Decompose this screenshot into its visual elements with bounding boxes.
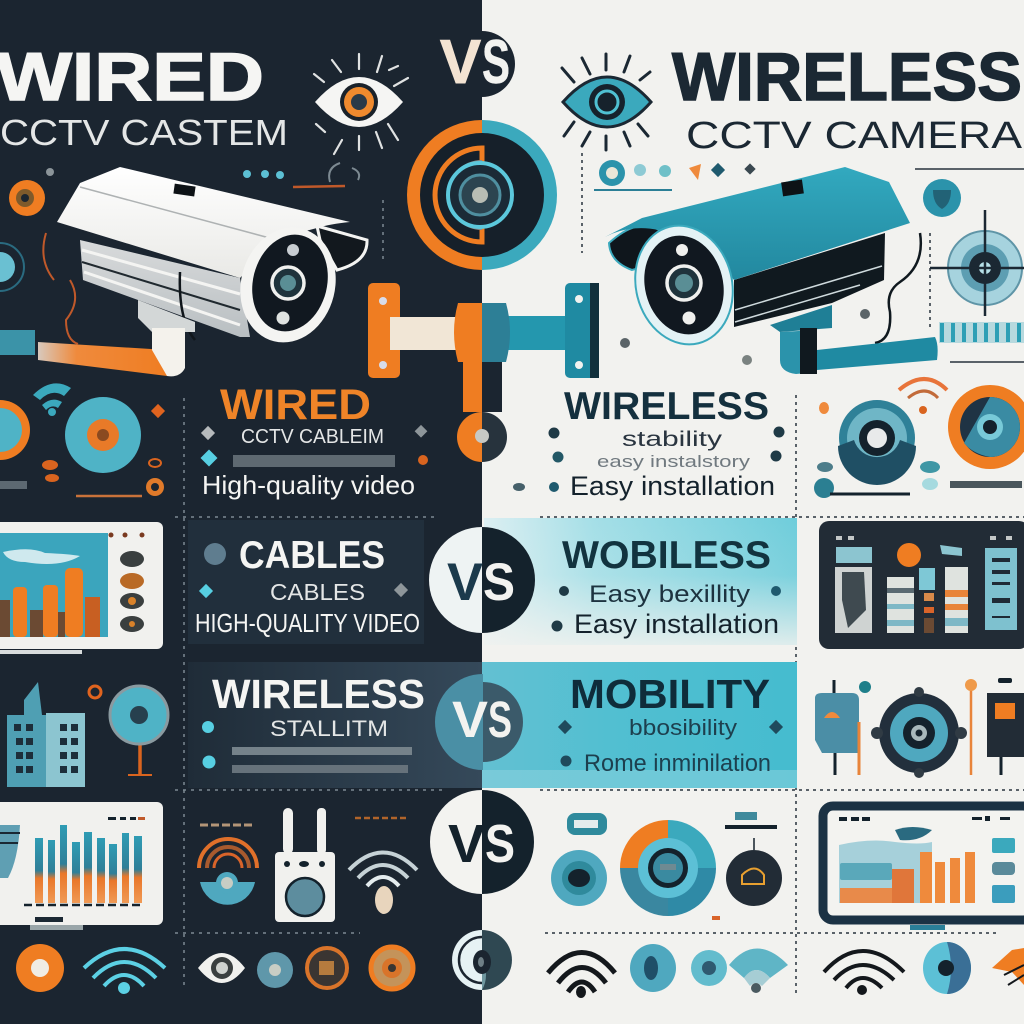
- central mount bracket: [368, 283, 599, 462]
- panel: wobiless: WOBILESS: [562, 534, 771, 577]
- row 4 right monitor chart: [823, 806, 1024, 930]
- heading: wireless: CCTV CAMERA: [686, 115, 1023, 157]
- panel: mobility: bbosibility: [629, 715, 737, 740]
- row 2 right dashboard: [819, 521, 1024, 649]
- row 3 right icons: [815, 678, 1024, 778]
- text block: wired: WIRED: [220, 381, 371, 429]
- panel: cables: HIGH-QUALITY VIDEO: [195, 608, 420, 638]
- heading: wired: WIRED: [0, 39, 264, 115]
- panel: mobility: MOBILITY: [570, 671, 770, 717]
- light right background: [482, 0, 1024, 1024]
- panel: wobiless: Easy installation: [574, 609, 779, 639]
- vs badge row 4: [430, 790, 534, 894]
- text block: wired: High-quality video: [202, 470, 415, 500]
- vs badge top: [440, 28, 515, 97]
- text block: wireless: easy instalstory: [597, 452, 751, 471]
- text block: wireless: stability: [622, 428, 723, 451]
- icon: eye, wired side: [314, 54, 408, 154]
- heading: wireless: WIRELESS: [672, 39, 1022, 115]
- vs badge row 3: V: [452, 691, 488, 748]
- row 4 left monitor chart: [0, 802, 163, 930]
- central lens icon: [407, 120, 557, 270]
- heading: wired: CCTV CASTEM: [0, 112, 288, 153]
- row 2 left panel: monitor: [0, 522, 163, 654]
- text block: wireless: Easy installation: [570, 471, 775, 501]
- text block: wireless: WIRELESS: [564, 385, 769, 428]
- text block: wired: [201, 381, 428, 500]
- bottom center split lens: [452, 930, 512, 990]
- vs badge row 2: V: [447, 553, 483, 612]
- panel: wobiless: [484, 518, 797, 645]
- vs badge row 3: S: [488, 691, 512, 748]
- orange arm of wired mount: [38, 342, 167, 376]
- bottom icons: wireless: [548, 942, 1024, 998]
- vs badge row 2: S: [483, 553, 515, 612]
- panel: wireless left: WIRELESS: [212, 671, 425, 717]
- text block: wireless: [513, 385, 784, 501]
- panel: wireless left: [188, 662, 482, 788]
- vs badge top: S: [482, 28, 510, 97]
- row 4 right icons: [551, 812, 782, 920]
- row 3 left icons: buildings: [7, 682, 168, 787]
- panel: wobiless: Easy bexillity: [589, 581, 750, 608]
- panel: cables: CABLES: [270, 579, 365, 605]
- vs badge row 2: [429, 527, 535, 633]
- bottom icons: wired: [16, 944, 413, 994]
- wired camera illustration: [38, 167, 367, 376]
- icon: eye, wireless side: [562, 54, 651, 150]
- wireless camera illustration: [605, 167, 938, 374]
- vs badge row 3: [435, 674, 523, 770]
- row 4 left icons: router and wifi: [199, 808, 417, 922]
- row 1 right icons: [814, 379, 1024, 498]
- vs badge row 4: S: [485, 814, 515, 874]
- panel: cables: [188, 520, 424, 644]
- small icons: wired upper left: [0, 163, 359, 355]
- row 1 left icons: [0, 383, 165, 496]
- heading: wired: [0, 39, 288, 153]
- panel: mobility: Rome inminilation: [584, 750, 771, 777]
- vs badge top: V: [440, 28, 481, 97]
- vs badge row 4: V: [448, 814, 485, 874]
- panel: cables: CABLES: [239, 534, 385, 577]
- panel: wireless left: STALLITM: [270, 716, 388, 741]
- heading: wireless: [672, 39, 1023, 157]
- small icons: wireless upper: [594, 160, 1024, 365]
- panel: mobility: [482, 662, 797, 788]
- text block: wired: CCTV CABLEIM: [241, 426, 384, 448]
- dark left background: [0, 0, 482, 1024]
